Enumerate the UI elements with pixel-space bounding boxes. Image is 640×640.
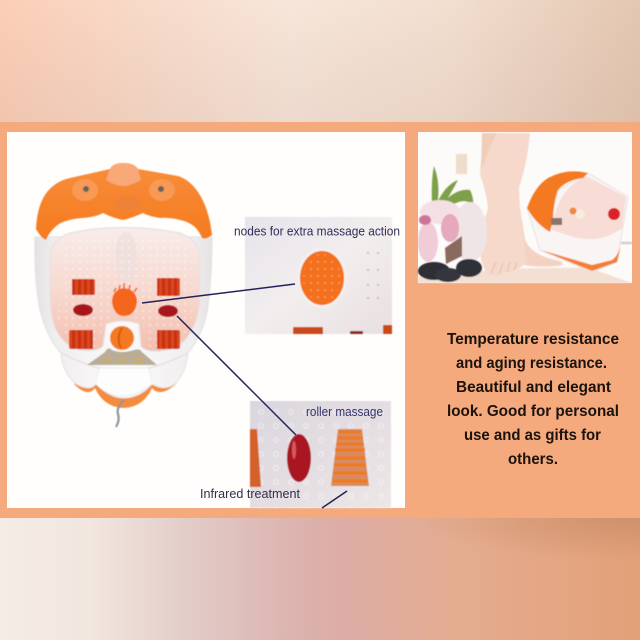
label: infrared treatment: Infrared treatment [200,486,300,501]
spa white body [527,173,628,272]
front lip shading [61,353,188,372]
line 1: Temperature resistance [447,331,619,348]
front foot [480,133,530,276]
left roller fragment [250,429,261,487]
rear foot [505,185,562,267]
orange base [74,376,176,408]
inset: roller and infrared photo [250,401,391,508]
control panel [87,348,157,365]
line 5: use and as gifts for [464,427,601,444]
spa orange base [541,245,621,271]
foot spa tub top view [35,163,212,427]
line 6: others. [508,451,558,468]
label: nodes: nodes for extra massage action [234,224,400,238]
speaker dots [115,232,137,282]
white body [35,237,212,398]
orange central band [0,122,640,518]
roller fragments [293,327,323,334]
spa basin [552,176,626,239]
dial [110,326,134,350]
orange node [297,248,347,308]
label: roller massage: roller massage [306,404,383,419]
infrared ovals [73,304,93,316]
line 4: look. Good for personal [447,403,619,420]
infrared oval [287,434,311,482]
line 2: and aging resistance. [456,355,607,372]
stones [418,262,450,280]
text block: product description [447,331,619,468]
roller [331,429,369,486]
massage node [112,288,137,316]
floor [418,268,632,283]
inset: massage node photo [245,217,392,334]
basin [50,228,200,351]
orange lid [36,163,212,240]
toes [491,262,517,274]
panel: product diagram [7,132,405,508]
leaves [432,166,473,209]
rollers [69,278,180,349]
spa cord [621,242,632,244]
top blurred background band [0,0,640,123]
towel [453,202,487,262]
callout lines [142,284,347,508]
power cord [116,400,124,427]
panel: lifestyle photo [418,132,632,283]
line 3: Beautiful and elegant [456,379,612,396]
flowers [420,200,460,224]
spa orange lid [527,171,588,232]
wall tag [456,154,467,174]
bottom blurred background band [0,518,640,640]
spa control details [608,208,620,220]
